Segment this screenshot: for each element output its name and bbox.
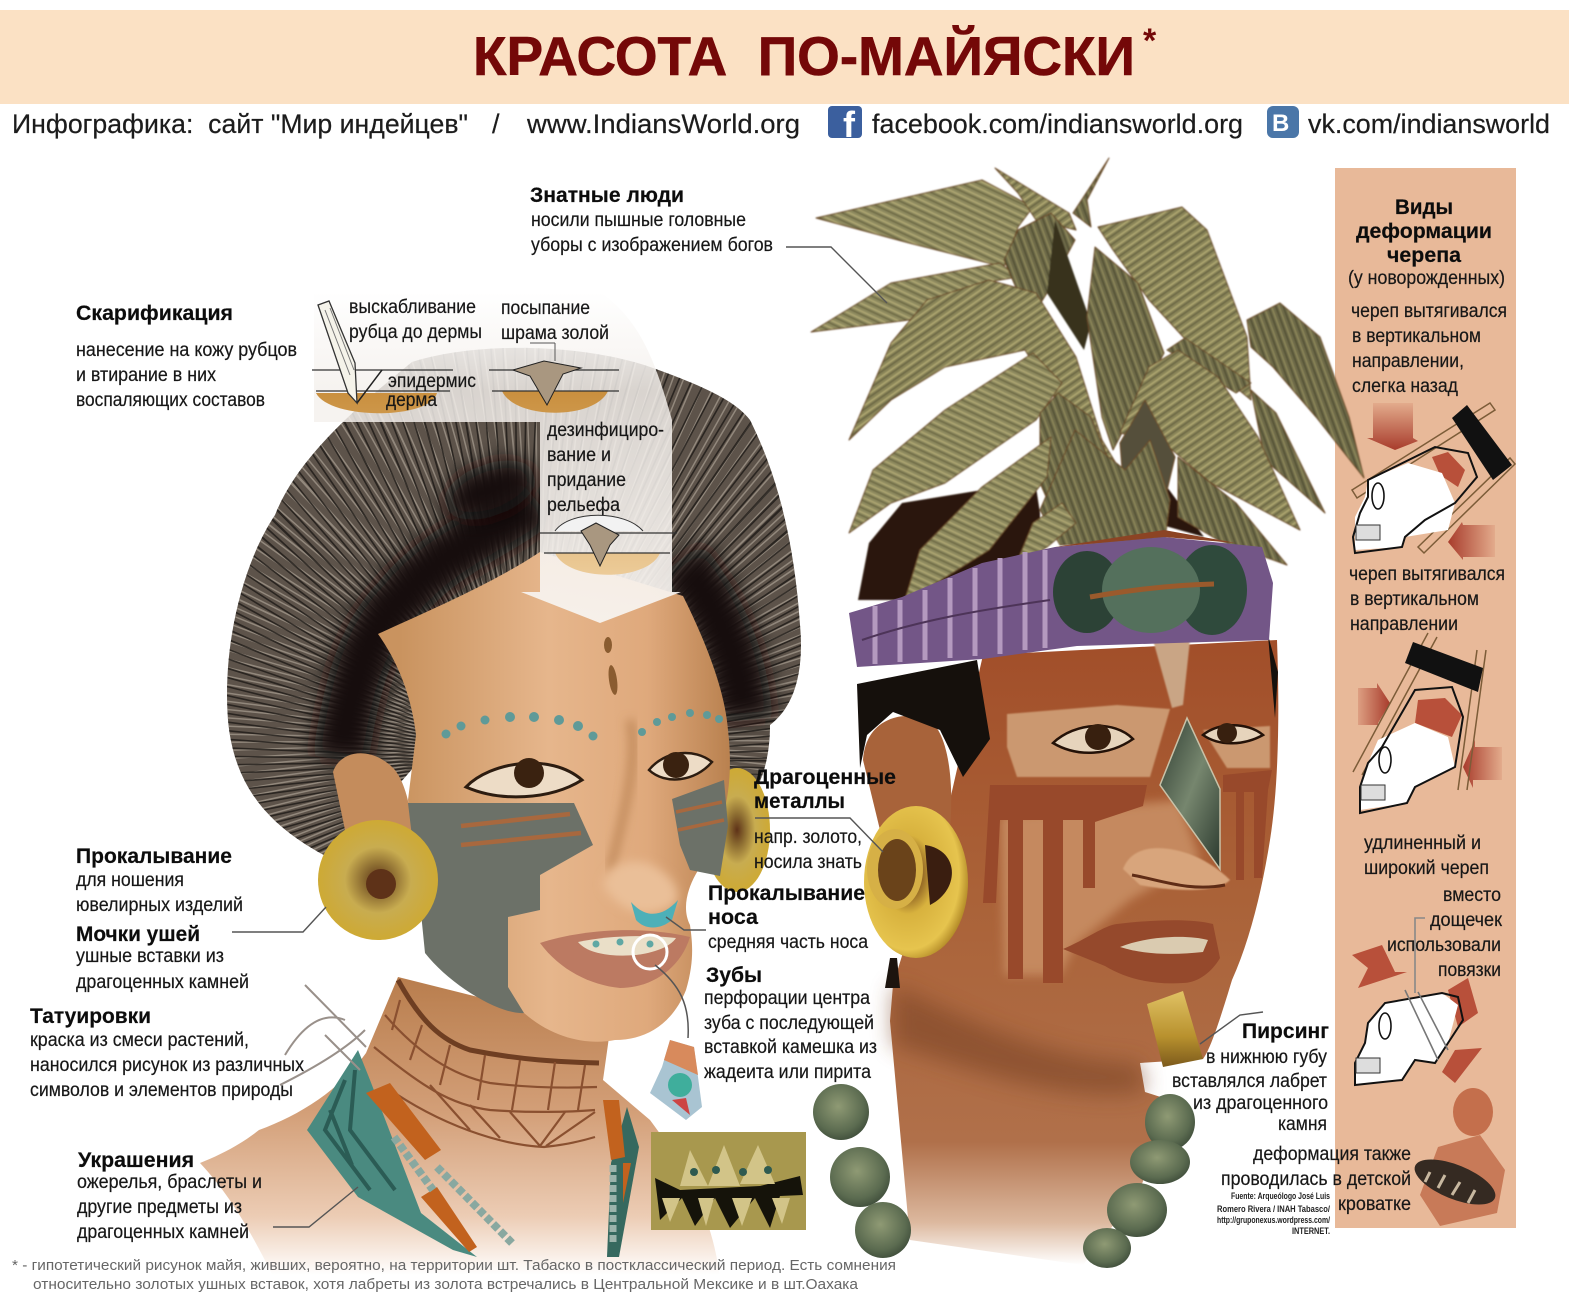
text: scarification steps: шрама золой — [501, 323, 609, 344]
text: piercing — [1172, 1020, 1329, 1135]
text: panel heading: (у новорожденных) — [1348, 268, 1505, 289]
text: cradle deformation: проводилась в детской — [1221, 1169, 1411, 1190]
nose — [603, 862, 677, 913]
man earring — [864, 806, 968, 958]
man headdress leaves — [811, 158, 1364, 603]
man light cheek — [1000, 800, 1200, 975]
ash fill — [513, 361, 581, 405]
lips and teeth — [540, 930, 690, 988]
text: deformation type 1: слегка назад — [1352, 376, 1458, 397]
man eye mask — [1007, 705, 1170, 777]
left necklace — [307, 1050, 477, 1257]
text: deformation type 2 — [1349, 564, 1505, 635]
text: teeth — [704, 964, 877, 1083]
jade disks — [1053, 551, 1121, 633]
text: nose piercing: носа — [708, 906, 758, 929]
eyes — [466, 720, 712, 870]
text: deformation type 3: повязки — [1438, 960, 1501, 981]
man eyes — [1053, 723, 1263, 753]
footnote: относительно золотых ушных вставок, хотя лабреты из золота встречались в Центральной Мексике и в шт.Оахака — [33, 1276, 859, 1293]
skull 2 diagram — [1353, 633, 1502, 813]
man ear — [863, 716, 951, 830]
text: ear piercing: Прокалывание — [76, 845, 232, 868]
skull 1 diagram — [1352, 403, 1515, 560]
text: tattoos — [30, 1005, 304, 1101]
relief scar — [555, 515, 643, 531]
cut and blade — [346, 370, 382, 403]
text: precious metals: носила знать — [754, 852, 862, 873]
text: deformation type 2: череп вытягивался — [1349, 564, 1505, 585]
text: deformation type 2: направлении — [1350, 614, 1458, 635]
text: piercing: в нижнюю губу — [1206, 1047, 1327, 1068]
text: deformation type 1: череп вытягивался — [1351, 301, 1507, 322]
text: ear piercing: ювелирных изделий — [76, 895, 243, 916]
hand sketch — [280, 985, 366, 1085]
text: jewellery: драгоценных камней — [77, 1222, 249, 1243]
text: deformation type 1 — [1351, 301, 1507, 397]
man nose — [1123, 848, 1230, 890]
woman face — [378, 552, 730, 1042]
text: nose piercing: Прокалывание — [708, 882, 865, 905]
dermis layers — [316, 391, 660, 575]
neck tattoo — [374, 980, 599, 1147]
text: precious metals — [754, 766, 896, 873]
text: scarification steps: дезинфициро- — [547, 420, 664, 441]
footnote — [12, 1257, 896, 1293]
woman chest and neck — [200, 977, 720, 1280]
text: noble headdress: носили пышные головные — [531, 210, 746, 231]
text: scarification steps: посыпание — [501, 298, 590, 319]
title: КРАСОТА ПО-МАЙЯСКИ — [473, 24, 1135, 87]
text: scarification steps: рельефа — [547, 495, 620, 516]
text: deformation type 1: в вертикальном — [1352, 326, 1481, 347]
man face paint — [983, 770, 1272, 983]
illustration: woman — [200, 340, 820, 1280]
text: panel heading: деформации — [1356, 220, 1492, 243]
cradle figurine — [1409, 1088, 1505, 1226]
beads — [813, 1084, 1195, 1268]
grey face tattoo — [408, 803, 593, 1013]
text: scarification steps: выскабливание — [349, 297, 476, 318]
labret — [1147, 991, 1203, 1067]
credits row: Инфографика: сайт "Мир индейцев" — [12, 109, 468, 139]
text: deformation type 3: использовали — [1387, 935, 1501, 956]
text: scarification: нанесение на кожу рубцов — [76, 340, 297, 361]
woman hair — [227, 348, 801, 855]
text: source — [1217, 1191, 1330, 1236]
title asterisk: * — [1143, 22, 1157, 60]
nose pendant — [1160, 718, 1220, 869]
arrow to amulet — [655, 965, 688, 1038]
man head and neck — [890, 640, 1278, 1265]
text: noble headdress: Знатные люди — [530, 184, 684, 207]
footnote: * - гипотетический рисунок майя, живших, вероятно, на территории шт. Табаско в постклассический период. Есть сомнения — [12, 1257, 896, 1274]
text: tattoos: символов и элементов природы — [30, 1080, 293, 1101]
text: tattoos: наносился рисунок из различных — [30, 1055, 304, 1076]
text: tattoos: Татуировки — [30, 1005, 151, 1028]
white arrow overlay: scarification steps — [314, 292, 681, 623]
tooth amulet — [650, 1040, 702, 1120]
forehead dots — [442, 709, 723, 740]
credits row: f — [843, 104, 856, 145]
credits row: facebook.com/indiansworld.org — [872, 109, 1243, 139]
text: ear piercing: для ношения — [76, 870, 184, 891]
text: panel heading: Виды — [1395, 196, 1453, 219]
credits row: В — [1272, 110, 1289, 137]
text: panel heading: черепа — [1387, 244, 1461, 267]
credits row: www.IndiansWorld.org — [526, 109, 800, 139]
man headband — [849, 537, 1273, 667]
credits row: / — [492, 109, 500, 139]
text: deformation type 3: вместо — [1443, 885, 1501, 906]
text: precious metals: напр. золото, — [754, 827, 862, 848]
tooth highlight circle — [633, 935, 667, 969]
man jaw shadow — [893, 985, 1145, 1095]
text: piercing: вставлялся лабрет — [1172, 1071, 1327, 1092]
text: scarification — [76, 302, 297, 411]
text: source: Fuente: Arqueólogo José Luis — [1231, 1191, 1330, 1201]
teeth photo — [651, 1132, 806, 1230]
text: source: http://gruponexus.wordpress.com/ — [1217, 1215, 1330, 1225]
text: teeth: зуба с последующей — [704, 1013, 874, 1034]
text: source: Romero Rivera / INAH Tabasco/ — [1217, 1204, 1330, 1214]
woman second earring — [704, 768, 770, 892]
panel: skull deformation background — [1335, 168, 1516, 1228]
text: piercing: камня — [1278, 1114, 1327, 1135]
right cheek tattoo — [672, 780, 728, 876]
scarification diagrams — [312, 301, 677, 575]
text: noble headdress — [530, 184, 773, 256]
nose ring — [631, 900, 678, 928]
text: jewellery — [77, 1149, 262, 1243]
illustration: man — [811, 158, 1364, 1268]
text: scarification: воспаляющих составов — [76, 390, 265, 411]
text: deformation type 3: дощечек — [1430, 910, 1503, 931]
text: jewellery: другие предметы из — [77, 1197, 242, 1218]
text: noble headdress: уборы с изображением богов — [531, 235, 773, 256]
text: scarification steps: вание и — [547, 445, 611, 466]
text: deformation type 3: удлиненный и — [1364, 833, 1481, 854]
right necklace — [607, 1107, 639, 1257]
text: precious metals: металлы — [754, 790, 845, 813]
text: jewellery: ожерелья, браслеты и — [77, 1172, 262, 1193]
text: ear piercing: драгоценных камней — [76, 972, 249, 993]
credits row: vk.com/indiansworld — [1308, 109, 1550, 139]
text: scarification steps: придание — [547, 470, 626, 491]
text: deformation type 3: широкий череп — [1364, 858, 1489, 879]
text: teeth: Зубы — [706, 964, 762, 987]
text: deformation type 3 — [1364, 833, 1503, 981]
text: deformation type 2: в вертикальном — [1350, 589, 1479, 610]
text: cradle deformation: деформация также — [1253, 1144, 1411, 1165]
text: ear piercing: Мочки ушей — [76, 923, 200, 946]
text: jewellery: Украшения — [78, 1149, 194, 1172]
text: nose piercing — [708, 882, 868, 953]
text: panel heading — [1348, 196, 1505, 289]
woman ear — [333, 753, 412, 860]
text: piercing: Пирсинг — [1242, 1020, 1329, 1043]
text: scarification steps: эпидермис — [388, 371, 476, 392]
text: nose piercing: средняя часть носа — [708, 932, 868, 953]
skull 3 diagram — [1352, 918, 1482, 1085]
text: deformation type 1: направлении, — [1352, 351, 1464, 372]
text: cradle deformation — [1221, 1144, 1411, 1215]
text: cradle deformation: кроватке — [1338, 1194, 1411, 1215]
forehead marks — [604, 637, 619, 695]
text: ear piercing — [76, 845, 249, 993]
text: scarification steps: рубца до дермы — [349, 322, 482, 343]
text: teeth: перфорации центра — [704, 988, 870, 1009]
text: teeth: жадеита или пирита — [704, 1062, 871, 1083]
gold earring woman — [318, 820, 438, 940]
leader lines — [232, 247, 1263, 1227]
text: scarification steps: дерма — [386, 390, 437, 411]
header band — [0, 10, 1569, 104]
text: scarification: и втирание в них — [76, 365, 216, 386]
man hair — [857, 635, 1278, 777]
text: ear piercing: ушные вставки из — [76, 946, 224, 967]
text: scarification: Скарификация — [76, 302, 233, 325]
text: teeth: вставкой камешка из — [704, 1037, 877, 1058]
credits row — [12, 104, 1550, 145]
man lips — [1063, 920, 1220, 983]
text: piercing: из драгоценного — [1193, 1093, 1328, 1114]
text: source: INTERNET. — [1292, 1226, 1330, 1236]
text: tattoos: краска из смеси растений, — [30, 1030, 249, 1051]
text: scarification steps — [349, 297, 664, 516]
text: precious metals: Драгоценные — [754, 766, 896, 789]
man forehead highlight — [1153, 640, 1190, 708]
